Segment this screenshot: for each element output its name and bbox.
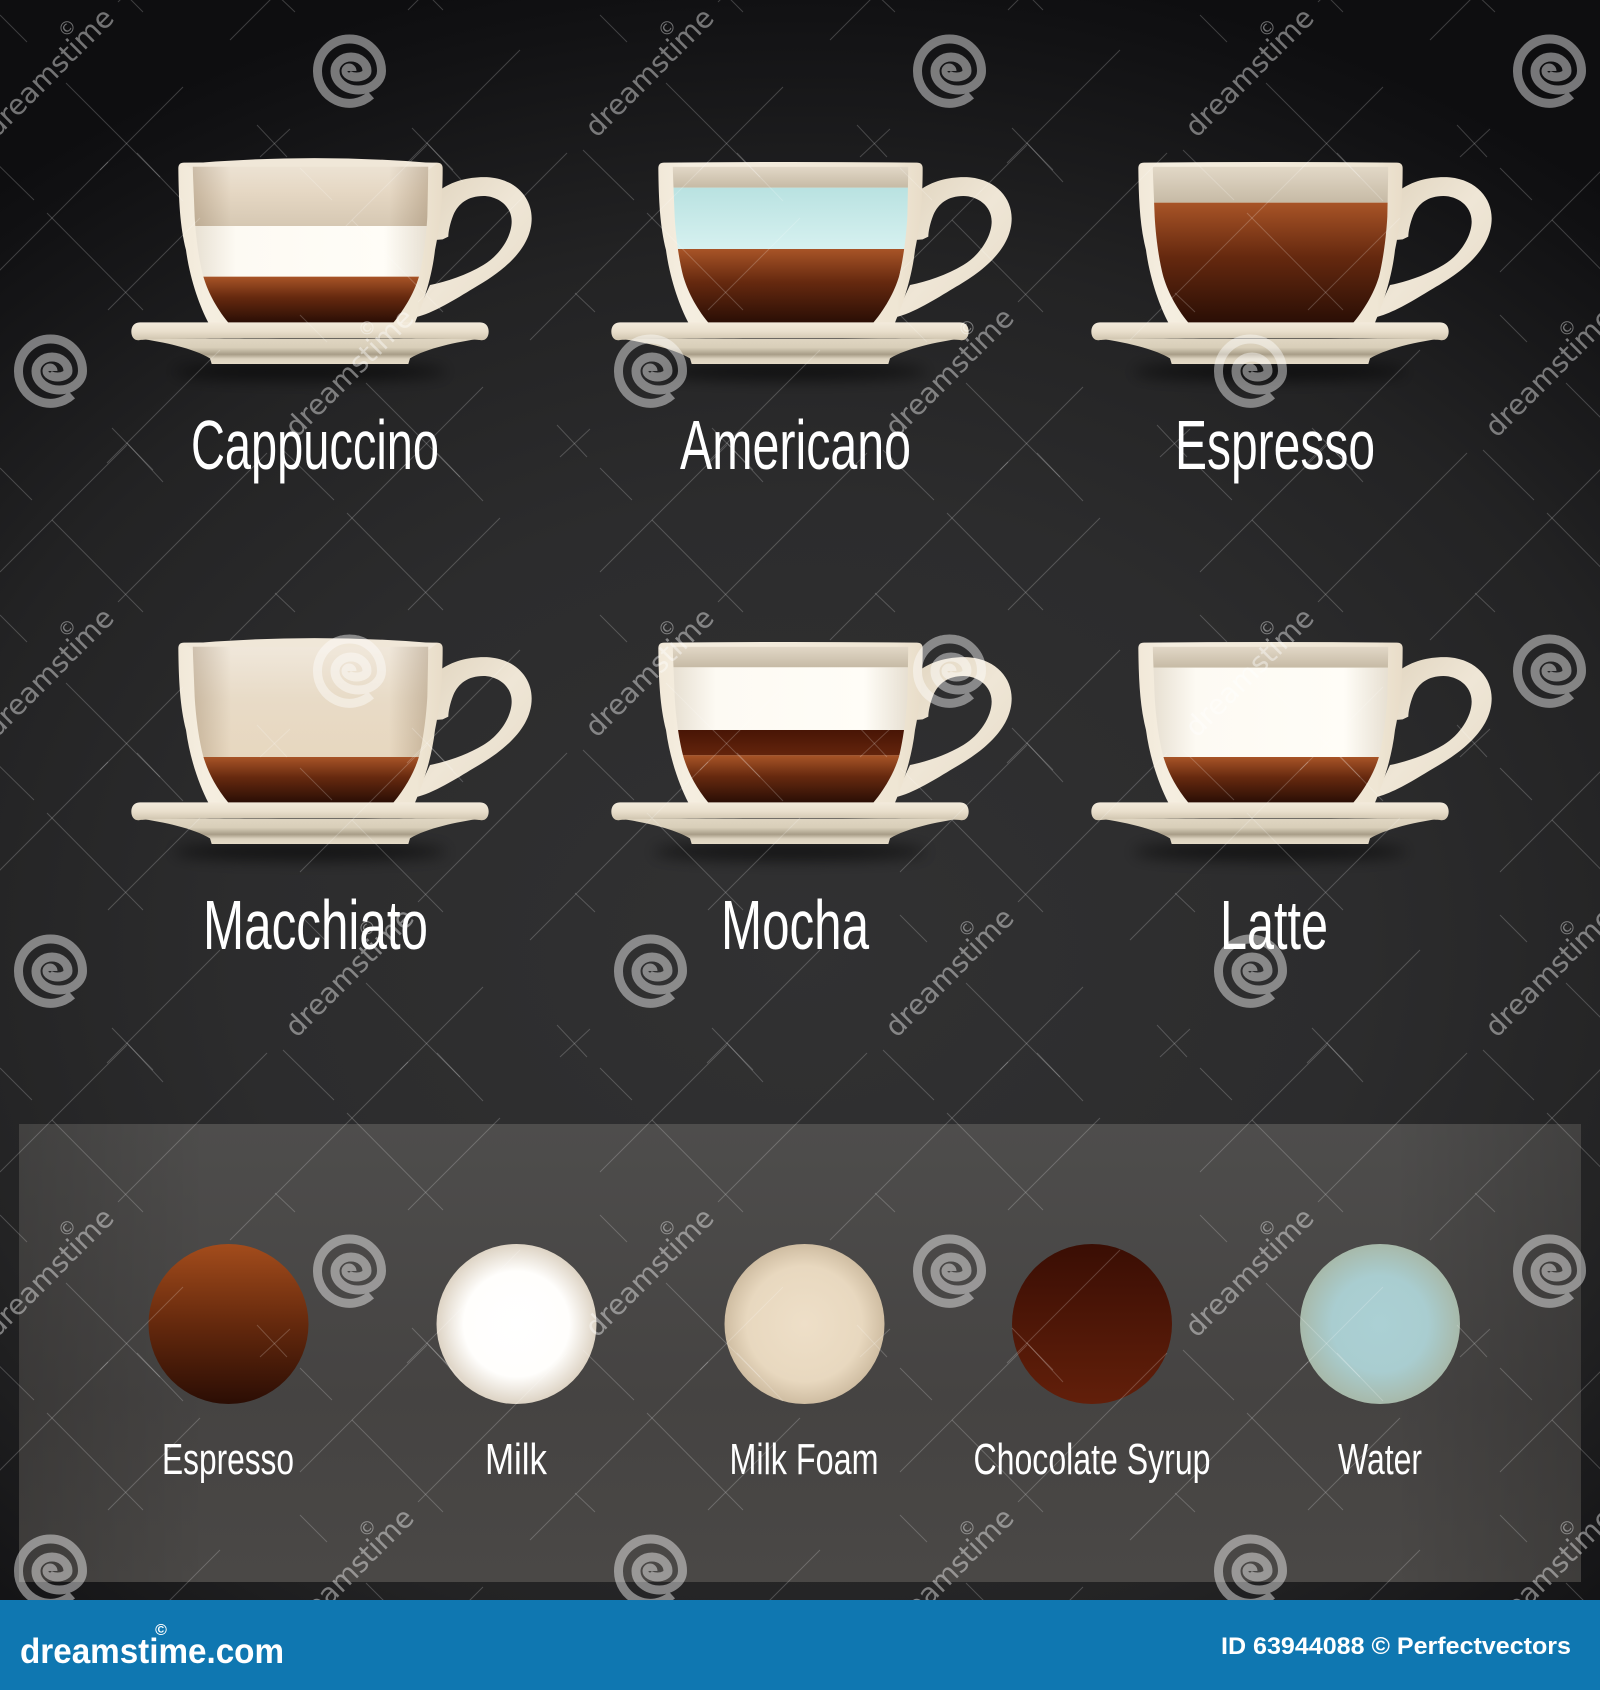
foam dome bbox=[185, 158, 437, 170]
watermark text: © bbox=[654, 615, 682, 642]
liquid layers bbox=[1147, 167, 1393, 323]
watermark text: © bbox=[54, 1215, 82, 1242]
liquid layers bbox=[667, 647, 913, 803]
footer image id and credit: ID 63944088 © Perfectvectors bbox=[1221, 1633, 1571, 1660]
watermark text: dreamstime bbox=[1178, 1201, 1320, 1343]
watermark text: dreamstime bbox=[878, 1501, 1020, 1643]
label: Macchiato: Macchiato bbox=[203, 886, 428, 964]
cup: Macchiato bbox=[131, 638, 532, 860]
swatch: milk foam bbox=[724, 1244, 884, 1404]
watermark text: dreamstime bbox=[878, 901, 1020, 1043]
panel: ingredient legend bbox=[19, 1124, 1581, 1582]
swatch: chocolate syrup bbox=[1012, 1244, 1172, 1404]
cup: Americano bbox=[611, 162, 1012, 380]
watermark text: © bbox=[354, 915, 382, 942]
swatch: water bbox=[1300, 1244, 1460, 1404]
watermark text: dreamstime bbox=[1178, 601, 1320, 743]
cup: Espresso bbox=[1091, 162, 1492, 380]
watermark text: dreamstime bbox=[278, 901, 420, 1043]
watermark text: © bbox=[54, 615, 82, 642]
footer bar bbox=[0, 1600, 1600, 1690]
watermark text: dreamstime bbox=[578, 1, 720, 143]
liquid layers bbox=[187, 160, 433, 323]
label: Cappuccino: Cappuccino bbox=[191, 406, 439, 484]
legend label: Chocolate Syrup: Chocolate Syrup bbox=[974, 1435, 1210, 1484]
cup: Mocha bbox=[611, 642, 1012, 860]
watermark text: © bbox=[1254, 615, 1282, 642]
watermark text: © bbox=[1254, 1215, 1282, 1242]
watermark text: © bbox=[954, 1515, 982, 1542]
watermark text: © bbox=[354, 315, 382, 342]
watermark text: © bbox=[954, 315, 982, 342]
watermark text: © bbox=[1254, 15, 1282, 42]
footer logo text: dreamstime.com bbox=[20, 1632, 284, 1671]
cup: Cappuccino bbox=[131, 158, 532, 380]
watermark text: © bbox=[954, 915, 982, 942]
watermark text: © bbox=[1554, 915, 1582, 942]
watermark text: dreamstime bbox=[1178, 1, 1320, 143]
watermark text: © bbox=[1554, 1515, 1582, 1542]
liquid layers bbox=[1147, 647, 1393, 803]
watermark text: dreamstime bbox=[578, 601, 720, 743]
watermark text: dreamstime bbox=[578, 1201, 720, 1343]
swatch: espresso bbox=[148, 1244, 308, 1404]
footer logo mark: © bbox=[155, 1622, 167, 1639]
legend label: Water: Water bbox=[1338, 1435, 1422, 1484]
label: Latte: Latte bbox=[1220, 886, 1328, 964]
label: Mocha: Mocha bbox=[721, 886, 869, 964]
watermark text: dreamstime bbox=[278, 1501, 420, 1643]
swatch: milk bbox=[436, 1244, 596, 1404]
legend label: Espresso: Espresso bbox=[162, 1435, 294, 1484]
label: Americano: Americano bbox=[680, 406, 911, 484]
watermark text: © bbox=[1554, 315, 1582, 342]
label: Espresso: Espresso bbox=[1175, 406, 1375, 484]
legend label: Milk: Milk bbox=[485, 1435, 548, 1484]
foam dome bbox=[185, 638, 437, 650]
cup: Latte bbox=[1091, 642, 1492, 860]
liquid layers bbox=[667, 167, 913, 323]
watermark text: © bbox=[654, 1215, 682, 1242]
watermark text: © bbox=[54, 15, 82, 42]
watermark text: © bbox=[354, 1515, 382, 1542]
watermark text: dreamstime bbox=[278, 301, 420, 443]
legend label: Milk Foam: Milk Foam bbox=[730, 1435, 878, 1484]
watermark text: dreamstime bbox=[878, 301, 1020, 443]
liquid layers bbox=[187, 640, 433, 803]
watermark text: © bbox=[654, 15, 682, 42]
